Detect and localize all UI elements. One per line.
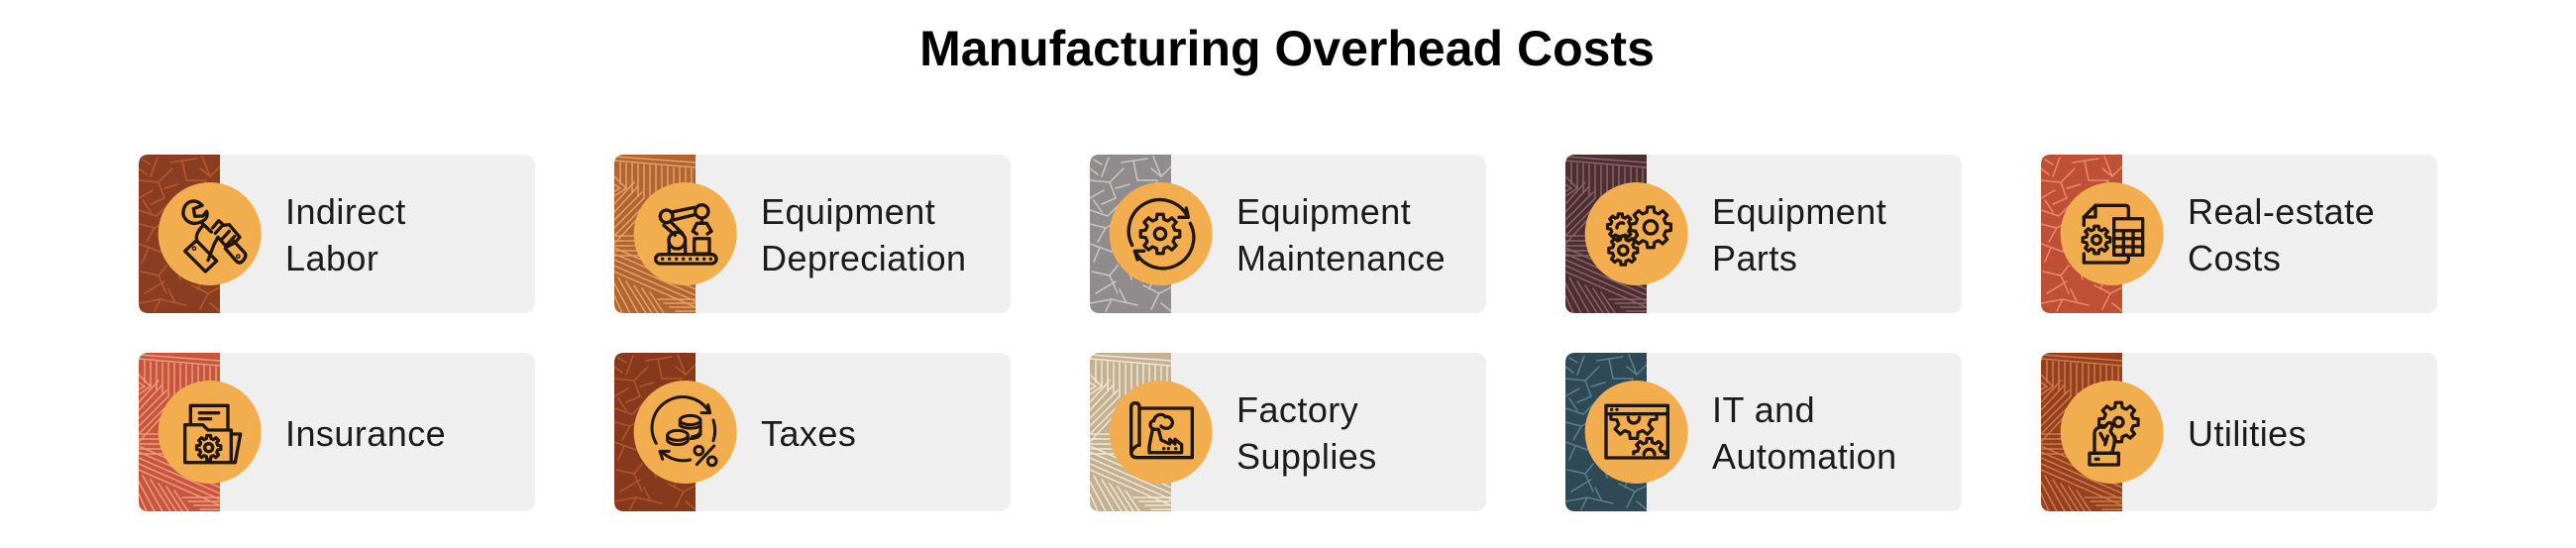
label: Taxes — [761, 413, 856, 454]
icon: coins with percent and arrows — [634, 381, 737, 484]
texture strip — [614, 353, 696, 511]
panel: Equipment Parts — [1565, 155, 1962, 313]
texture strip — [1090, 353, 1171, 511]
panel: Factory Supplies — [1090, 353, 1486, 511]
label: Factory — [1236, 389, 1358, 430]
icon: folder with gear — [159, 381, 262, 484]
label: Equipment — [761, 191, 935, 232]
label: Supplies — [1236, 436, 1377, 477]
icon: gear with cycle arrows — [1110, 182, 1213, 285]
label: Depreciation — [761, 238, 967, 278]
icon: three gears — [1585, 182, 1688, 285]
panel: Real-estate Costs — [2041, 155, 2437, 313]
texture strip — [614, 155, 696, 313]
texture strip — [1565, 155, 1647, 313]
panel: Equipment Maintenance — [1090, 155, 1486, 313]
title: Manufacturing Overhead Costs — [919, 21, 1655, 76]
panel: Equipment Depreciation — [614, 155, 1011, 313]
label: Real-estate — [2188, 191, 2375, 232]
label: Utilities — [2188, 413, 2307, 454]
label: Parts — [1712, 238, 1797, 278]
texture strip — [2041, 155, 2122, 313]
texture strip — [1090, 155, 1171, 313]
icon: browser window with gears — [1585, 381, 1688, 484]
icon: factory blueprint — [1110, 381, 1213, 484]
label: Indirect — [285, 191, 406, 232]
label: Automation — [1712, 436, 1897, 477]
icon: hand holding gear — [2061, 381, 2164, 484]
icon: document with gear and calculator — [2061, 182, 2164, 285]
texture strip — [1565, 353, 1647, 511]
panel: IT and Automation — [1565, 353, 1962, 511]
panel: Utilities — [2041, 353, 2437, 511]
panel: Insurance — [139, 353, 535, 511]
panel: Taxes — [614, 353, 1011, 511]
label: Insurance — [285, 413, 446, 454]
texture strip — [139, 155, 220, 313]
label: Equipment — [1712, 191, 1886, 232]
label: Labor — [285, 238, 378, 278]
icon: robot arm on conveyor — [634, 182, 737, 285]
label: Maintenance — [1236, 238, 1446, 278]
icon: hand holding wrench — [159, 182, 262, 285]
label: Equipment — [1236, 191, 1411, 232]
texture strip — [139, 353, 220, 511]
label: Costs — [2188, 238, 2281, 278]
label: IT and — [1712, 389, 1815, 430]
texture strip — [2041, 353, 2122, 511]
panel: Indirect Labor — [139, 155, 535, 313]
